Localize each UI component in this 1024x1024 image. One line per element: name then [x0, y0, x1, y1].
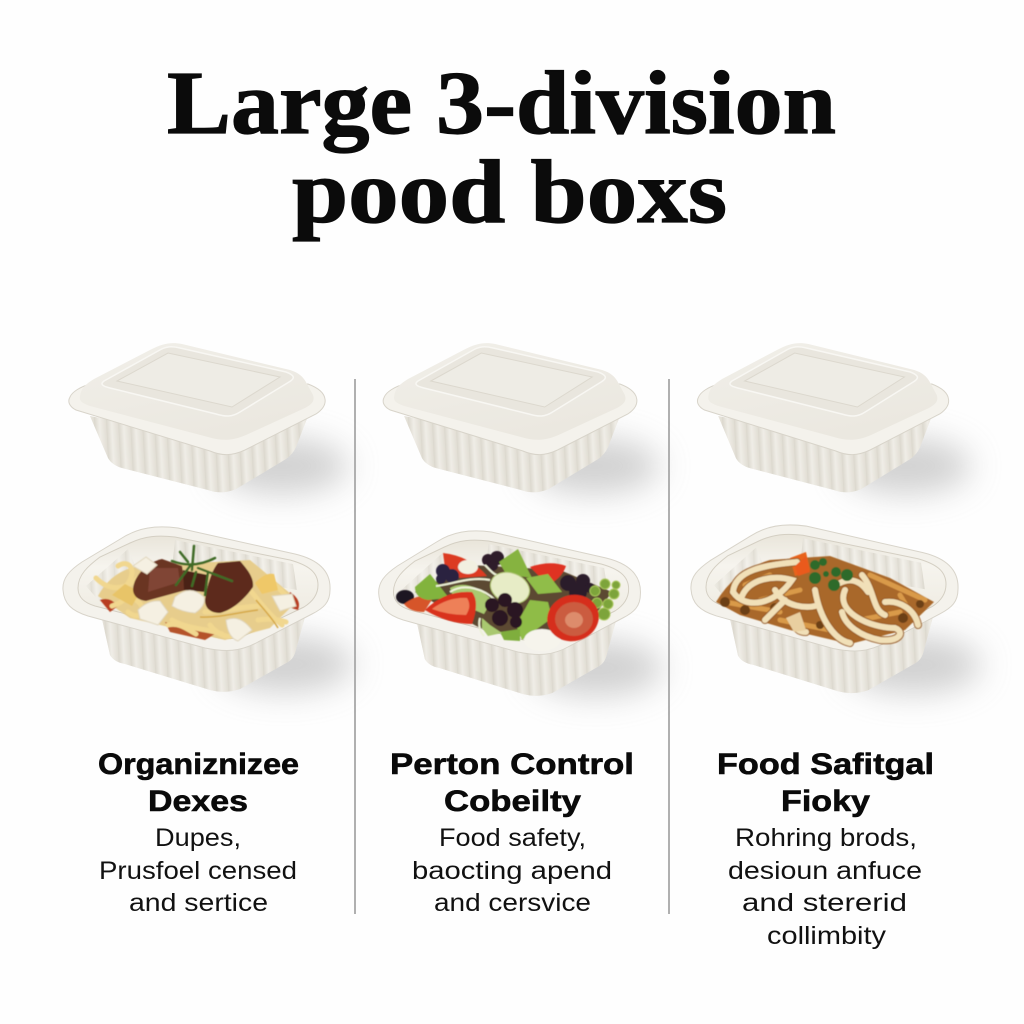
column 3 body text: desioun anfuce [728, 857, 922, 885]
food: stir-fried noodles [716, 552, 934, 644]
column 1 body text: Dupes, [155, 824, 241, 852]
column 1 body text: and sertice [129, 889, 268, 917]
column 1 heading [98, 748, 299, 818]
column 2 body text: baocting apend [412, 857, 612, 885]
column 2 body text: and cersvice [434, 889, 591, 917]
title: pood boxs [292, 143, 727, 242]
column 3 heading: Food Safitgal [717, 748, 934, 781]
column 2 heading: Perton Control [390, 748, 634, 781]
closed box with lid [69, 343, 348, 494]
panel: food safety [691, 343, 981, 693]
divider right [668, 379, 670, 914]
column 2 heading [390, 748, 634, 818]
open box with beef and noodles [63, 527, 353, 692]
food: mixed salad [396, 549, 620, 651]
column 3 heading [717, 748, 934, 818]
column 1 body text [99, 824, 297, 917]
closed box with lid [697, 343, 971, 494]
closed box with lid [383, 343, 660, 494]
divider left [354, 379, 356, 914]
open box with noodles [691, 525, 981, 693]
column 1 heading: Organiznizee [98, 748, 299, 781]
column 1 body text: Prusfoel censed [99, 857, 297, 885]
open box with salad [379, 531, 663, 696]
title [167, 54, 836, 242]
column 3 body text: collimbity [767, 922, 887, 950]
column 3 body text: Rohring brods, [735, 824, 917, 852]
food: noodles and beef [96, 546, 299, 641]
panel: organized boxes [63, 343, 353, 692]
column 3 body text: and stererid [742, 889, 907, 917]
column 2 heading: Cobeilty [444, 785, 581, 818]
column 2 body text: Food safety, [439, 824, 586, 852]
column 3 heading: Fioky [781, 785, 870, 818]
column 3 body text [728, 824, 922, 950]
column 2 body text [412, 824, 612, 917]
panel: portion control [379, 343, 663, 696]
title: Large 3-division [167, 54, 836, 153]
column 1 heading: Dexes [148, 785, 248, 818]
